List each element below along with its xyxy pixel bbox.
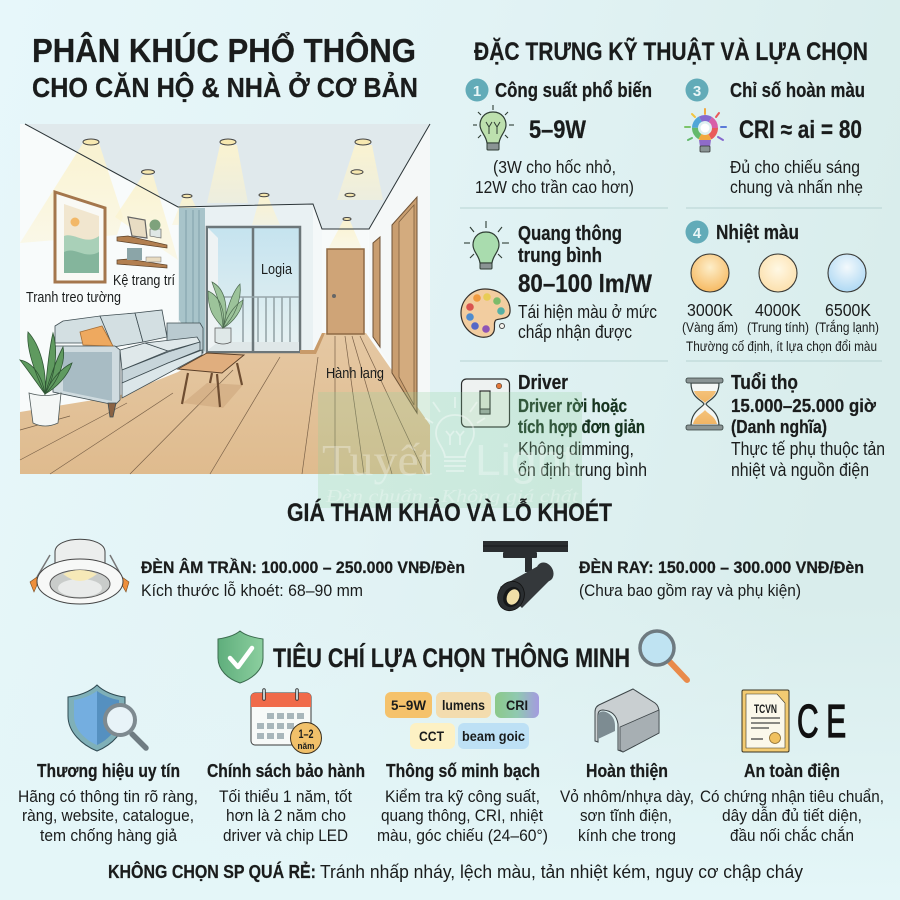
- panel: colour temperature: Thường cố định, ít lựa chọn đổi màu: [686, 339, 877, 354]
- icon: wall switch: [462, 379, 510, 427]
- criterion: transparent specs: quang thông, CRI, nhiệt: [381, 806, 543, 825]
- panel: lifespan: nhiệt và nguồn điện: [731, 460, 869, 480]
- panel: power: [466, 78, 652, 197]
- floor plant: [20, 332, 72, 426]
- heading: reference price: GIÁ THAM KHẢO VÀ LỖ KHOÉT: [287, 497, 612, 527]
- warning note: Tránh nhấp nháy, lệch màu, tản nhiệt kém, nguy cơ chập cháy: [320, 862, 803, 882]
- heading: smart selection criteria: [218, 631, 687, 683]
- criterion: reputable brand: Hãng có thông tin rõ ràng,: [18, 787, 198, 806]
- panel: driver: tích hợp đơn giản: [518, 416, 645, 437]
- balcony door: [207, 227, 300, 352]
- warning note: [108, 861, 803, 882]
- criterion: warranty: Tối thiểu 1 năm, tốt: [219, 787, 352, 806]
- icon: bulb: [464, 221, 509, 269]
- icon: green shield: [218, 631, 263, 683]
- criterion: finishing: kính che trong: [578, 826, 676, 845]
- icon: TCVN certificate: TCVN: [754, 704, 777, 716]
- panel: luminous flux: chấp nhận được: [518, 322, 632, 342]
- panel: luminous flux: Quang thông: [518, 222, 622, 245]
- watermark: Tuyết: [322, 436, 432, 485]
- panel: power: 5–9W: [529, 116, 586, 144]
- price: recessed downlight: [30, 539, 465, 604]
- criterion: reputable brand: Thương hiệu uy tín: [37, 761, 180, 781]
- panel: driver: [462, 372, 647, 480]
- icon: calendar: 1–2: [298, 727, 314, 741]
- criterion: transparent specs: Kiểm tra kỹ công suất,: [385, 787, 540, 806]
- panel: power: (3W cho hốc nhỏ,: [493, 157, 616, 177]
- spec tags: lumens: [442, 697, 485, 713]
- panel: colour rendering: CRI ≈ ai = 80: [739, 116, 862, 144]
- criterion: finishing: Vỏ nhôm/nhựa dày,: [560, 787, 694, 806]
- scene labels: Logia: [261, 261, 293, 278]
- criterion: reputable brand: ràng, website, catalogue,: [22, 806, 194, 825]
- criterion: warranty: Chính sách bảo hành: [207, 761, 365, 781]
- panel: power: Công suất phổ biến: [495, 80, 652, 102]
- criterion: electrical safety: An toàn điện: [744, 761, 840, 781]
- recessed lamps: [83, 139, 371, 220]
- criterion: transparent specs: Thông số minh bạch: [386, 761, 540, 781]
- icon: green bulb: [473, 105, 514, 150]
- panel: colour temperature: 3000K: [687, 300, 733, 320]
- scene labels: Kệ trang trí: [113, 272, 176, 289]
- icon: calendar: năm: [298, 741, 314, 751]
- corridor wall: [322, 229, 368, 333]
- icon: aluminium profile: [595, 689, 659, 752]
- criterion: electrical safety: dây dẫn đủ tiết diện,: [722, 806, 862, 825]
- scene labels: Tranh treo tường: [26, 289, 121, 306]
- number badge 4: 4: [693, 225, 702, 242]
- icon: palette: [461, 289, 510, 337]
- number badge 3: [686, 78, 708, 102]
- price: recessed downlight: Kích thước lỗ khoét: 68–90 mm: [141, 581, 363, 600]
- panel: colour temperature: Nhiệt màu: [716, 222, 799, 244]
- number badge 1: 1: [473, 83, 481, 100]
- title: CHO CĂN HỘ & NHÀ Ở CƠ BẢN: [32, 71, 418, 103]
- number badge 1: [466, 78, 488, 102]
- price: recessed downlight: ĐÈN ÂM TRẦN: 100.000 – 250.000 VNĐ/Đèn: [141, 558, 465, 577]
- price: track light: [483, 541, 864, 615]
- icon: hourglass: [686, 378, 723, 430]
- illustration: apartment interior: [20, 124, 430, 474]
- decorative shelves: [117, 217, 167, 268]
- CE mark: CE: [797, 697, 846, 748]
- title: [32, 31, 418, 103]
- criterion: reputable brand: tem chống hàng giả: [40, 826, 177, 845]
- icon: downlight: [30, 539, 129, 604]
- criterion: electrical safety: Có chứng nhận tiêu chuẩn,: [700, 787, 884, 806]
- icon: shield and magnifier: [68, 685, 146, 751]
- panel: colour rendering: Chỉ số hoàn màu: [730, 80, 865, 102]
- panel: driver: Driver rời hoặc: [518, 395, 627, 416]
- number badge 3: 3: [693, 83, 701, 100]
- panel: power: 12W cho trần cao hơn): [475, 177, 634, 197]
- panel: driver: Không dimming,: [518, 439, 634, 459]
- spec tags: CCT: [419, 728, 444, 744]
- panel: colour temperature: 4000K: [755, 300, 801, 320]
- balcony plant: [208, 282, 243, 344]
- criterion: warranty: driver và chip LED: [223, 826, 348, 845]
- panel: lifespan: [686, 372, 885, 480]
- criterion: warranty: [207, 690, 365, 845]
- panel: luminous flux: trung bình: [518, 244, 602, 267]
- panel: colour temperature: 6500K: [825, 300, 871, 320]
- spec tags: 5–9W: [391, 697, 427, 713]
- spec tags: [385, 692, 539, 749]
- panel: luminous flux: Tái hiện màu ở mức: [518, 302, 657, 322]
- icon: TCVN certificate: [742, 690, 789, 752]
- curtain: [179, 208, 205, 352]
- icon: calendar: [251, 690, 322, 754]
- wall painting: [55, 192, 105, 282]
- panel: driver: ổn định trung bình: [518, 460, 647, 480]
- ceiling: [20, 124, 430, 229]
- panel: luminous flux: [461, 221, 657, 342]
- panel: colour temperature: (Trắng lạnh): [815, 320, 879, 335]
- warning note: KHÔNG CHỌN SP QUÁ RẺ:: [108, 861, 316, 882]
- panel: colour rendering: Đủ cho chiếu sáng: [730, 157, 860, 177]
- criterion: transparent specs: màu, góc chiếu (24–60°): [377, 826, 548, 845]
- panel: colour temperature: (Vàng ấm): [682, 320, 738, 335]
- icon: track spotlight: [483, 541, 568, 615]
- watermark: Light: [475, 436, 575, 485]
- watermark: Đèn chuẩn - Không giá chất: [325, 486, 579, 506]
- spec tags: beam goic: [462, 728, 525, 744]
- heading: smart selection criteria: TIÊU CHÍ LỰA CHỌN THÔNG MINH: [273, 642, 630, 673]
- criterion: finishing: Hoàn thiện: [586, 761, 668, 781]
- criterion: electrical safety: đầu nối chắc chắn: [730, 826, 854, 845]
- panel: colour temperature: [682, 220, 879, 354]
- panel: driver: Driver: [518, 372, 568, 394]
- panel: lifespan: (Danh nghĩa): [731, 416, 827, 437]
- back wall: [178, 204, 322, 355]
- panel: colour rendering: chung và nhấn nhẹ: [730, 177, 863, 197]
- sofa: [53, 310, 203, 417]
- panel: lifespan: 15.000–25.000 giờ: [731, 395, 877, 416]
- panel: luminous flux: 80–100 lm/W: [518, 270, 652, 298]
- criterion: transparent specs: [377, 692, 548, 845]
- panel: lifespan: Tuổi thọ: [731, 372, 798, 394]
- criterion: warranty: hơn là 2 năm cho: [226, 806, 346, 825]
- price: track light: ĐÈN RAY: 150.000 – 300.000 VNĐ/Đèn: [579, 558, 864, 577]
- scene labels: [26, 261, 384, 382]
- icon: rainbow bulb: [685, 109, 726, 152]
- price: track light: (Chưa bao gồm ray và phụ kiện): [579, 581, 801, 600]
- floor: [20, 333, 430, 474]
- watermark: [318, 392, 582, 508]
- criterion: electrical safety: [700, 690, 884, 845]
- corridor door: [327, 249, 364, 334]
- criterion: finishing: [560, 689, 694, 845]
- side doors: [373, 237, 380, 347]
- coffee table: [178, 353, 244, 408]
- title: PHÂN KHÚC PHỔ THÔNG: [32, 31, 416, 69]
- criterion: finishing: sơn tĩnh điện,: [580, 806, 672, 825]
- spec tags: CRI: [506, 697, 528, 713]
- panel: colour rendering: [685, 78, 865, 197]
- icon: magnifier: [640, 631, 687, 680]
- number badge 4: [686, 220, 708, 244]
- panel: colour temperature: (Trung tính): [747, 320, 809, 335]
- light cones: [20, 143, 383, 260]
- colour swatches: [691, 254, 866, 292]
- scene labels: Hành lang: [326, 365, 384, 382]
- baseboard: [300, 333, 325, 354]
- criterion: reputable brand: [18, 685, 198, 845]
